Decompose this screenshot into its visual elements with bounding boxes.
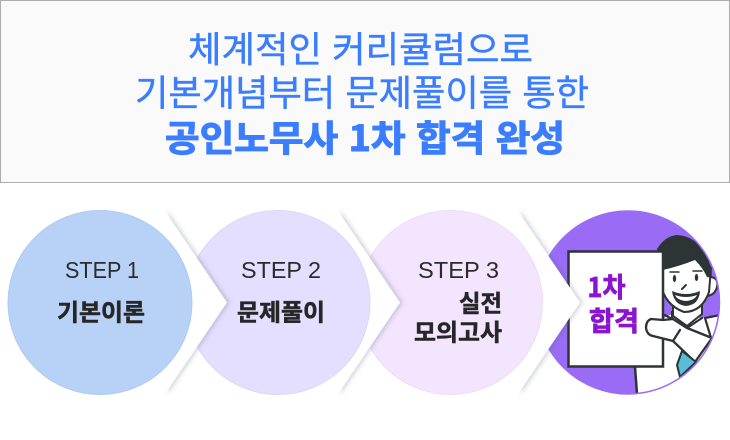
- body: [636, 314, 718, 393]
- step 4: goal circle: [536, 210, 725, 396]
- step 3 text: 실전: [459, 284, 502, 318]
- step 2 text: STEP 2: [241, 257, 321, 283]
- heading line 3: 공인노무사 1차 합격 완성: [165, 110, 565, 162]
- neck: [673, 300, 702, 326]
- step 3 text: [414, 257, 502, 348]
- step 3 text: STEP 3: [418, 257, 499, 283]
- goal label: 1차: [588, 266, 626, 305]
- step 2 text: 문제풀이: [237, 294, 325, 328]
- step 1 text: [57, 257, 145, 328]
- step 2 text: [237, 257, 325, 328]
- step 2 circle: [186, 210, 370, 394]
- heading line 2: 기본개념부터 문제풀이를 통한: [135, 64, 589, 116]
- step 3 text: 모의고사: [414, 314, 502, 348]
- arrow 2: [338, 211, 400, 394]
- arrow 3: [518, 211, 580, 394]
- step 3 circle: [358, 210, 542, 394]
- eyes and brows: [670, 271, 702, 272]
- face: [664, 260, 712, 313]
- header panel: [0, 0, 730, 182]
- step 1 text: STEP 1: [65, 257, 139, 283]
- heading line 1: 체계적인 커리큘럼으로: [188, 21, 533, 73]
- hair: [657, 235, 712, 278]
- paper: [568, 252, 663, 366]
- mouth: [672, 291, 700, 306]
- ear: [707, 277, 717, 296]
- arrow 1: [165, 211, 227, 394]
- step 4: goal circle: 합격: [589, 300, 639, 339]
- straps: [664, 310, 718, 337]
- shirt: [677, 351, 696, 377]
- step 1 circle: [8, 210, 192, 394]
- arm and hand: [646, 319, 712, 362]
- step 1 text: 기본이론: [57, 294, 145, 328]
- character illustration: [568, 235, 725, 396]
